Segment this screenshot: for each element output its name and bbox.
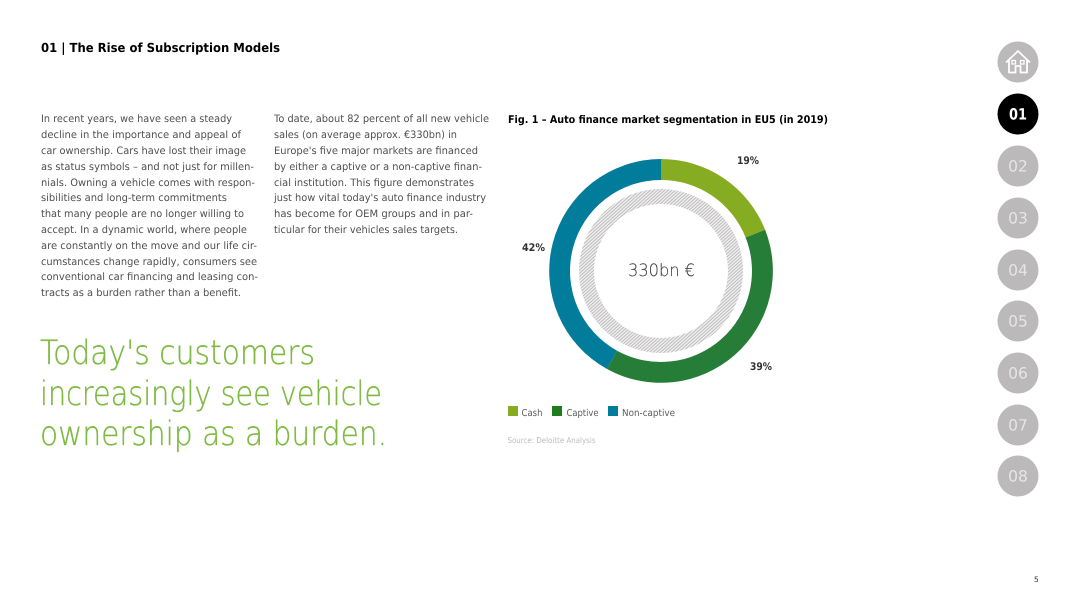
text block: right column: ticular for their vehicles sales targets. <box>274 225 458 236</box>
segment: cash 19% <box>661 159 765 238</box>
figure heading: Fig. 1 – Auto finance market segmentation in EU5 (in 2019) <box>508 114 828 126</box>
segment: non-captive 42% <box>549 159 661 369</box>
page number: 5 <box>1034 575 1039 584</box>
nav item 07: 07 <box>1008 416 1028 434</box>
nav item 03 <box>998 198 1038 238</box>
nav item 05 <box>998 300 1038 342</box>
nav item 06 <box>998 352 1038 394</box>
text block: left column: In recent years, we have seen a steady <box>41 114 232 125</box>
nav item 01 active <box>998 94 1038 134</box>
nav item 04 <box>998 250 1038 290</box>
source note: Source: Deloitte Analysis <box>508 436 596 445</box>
text block: right column: cial institution. This figure demonstrates <box>274 178 474 189</box>
text block: left column: car ownership. Cars have lost their image <box>41 146 246 157</box>
legend: Cash <box>522 408 542 419</box>
pull quote: Today's customers <box>40 333 315 372</box>
nav item 01 active: 01 <box>1009 106 1027 124</box>
text block: left column: accept. In a dynamic world, where people <box>41 225 247 236</box>
donut chart <box>549 159 773 383</box>
label: 19%: 19% <box>737 155 759 167</box>
legend <box>508 406 675 419</box>
text block: left column: conventional car financing and leasing con- <box>41 272 258 283</box>
label: 39%: 39% <box>750 361 772 373</box>
text block: right column: just how vital today's auto finance industry <box>273 193 486 204</box>
text block: left column: as status symbols – and not just for millen- <box>41 162 254 173</box>
text block: right column: Europe's five major markets are financed <box>274 146 478 157</box>
legend: Non-captive <box>622 408 675 419</box>
title: 01 | The Rise of Subscription Models <box>41 40 280 55</box>
pull quote: ownership as a burden. <box>40 414 387 453</box>
text block: left column <box>41 114 258 299</box>
text block: right column <box>273 114 489 236</box>
pull quote: increasingly see vehicle <box>40 374 382 413</box>
nav item 03: 03 <box>1008 210 1028 228</box>
label: 42%: 42% <box>522 242 545 254</box>
text block: right column: by either a captive or a non-captive finan- <box>274 162 482 173</box>
nav item 08: 08 <box>1008 468 1028 486</box>
text block: left column: sibilities and long-term commitments <box>41 193 227 204</box>
nav item 02 <box>998 146 1038 186</box>
segment: captive 39% <box>607 230 773 383</box>
navigation sidebar <box>998 42 1038 496</box>
nav item 06: 06 <box>1008 364 1028 382</box>
text block: right column: To date, about 82 percent of all new vehicle <box>273 114 489 125</box>
icon: home <box>998 42 1038 82</box>
pull quote <box>40 333 387 453</box>
legend: Captive <box>566 408 599 419</box>
text block: right column: has become for OEM groups and in par- <box>274 209 473 220</box>
nav item 08 <box>998 456 1038 496</box>
hatched inner ring <box>586 196 736 346</box>
text block: left column: nials. Owning a vehicle comes with respon- <box>41 178 255 189</box>
text block: left column: cumstances change rapidly, consumers see <box>41 257 257 268</box>
text block: left column: are constantly on the move and our life cir- <box>41 241 257 252</box>
text block: left column: that many people are no longer willing to <box>41 209 244 220</box>
nav item 05: 05 <box>1008 312 1028 330</box>
text block: right column: sales (on average approx. €330bn) in <box>274 130 457 141</box>
nav item 07 <box>998 404 1038 446</box>
center value: 330bn € <box>628 261 695 281</box>
text block: left column: tracts as a burden rather than a benefit. <box>41 288 241 299</box>
text block: left column: decline in the importance and appeal of <box>41 130 241 141</box>
nav item 02: 02 <box>1008 158 1028 176</box>
nav item 04: 04 <box>1008 262 1028 280</box>
